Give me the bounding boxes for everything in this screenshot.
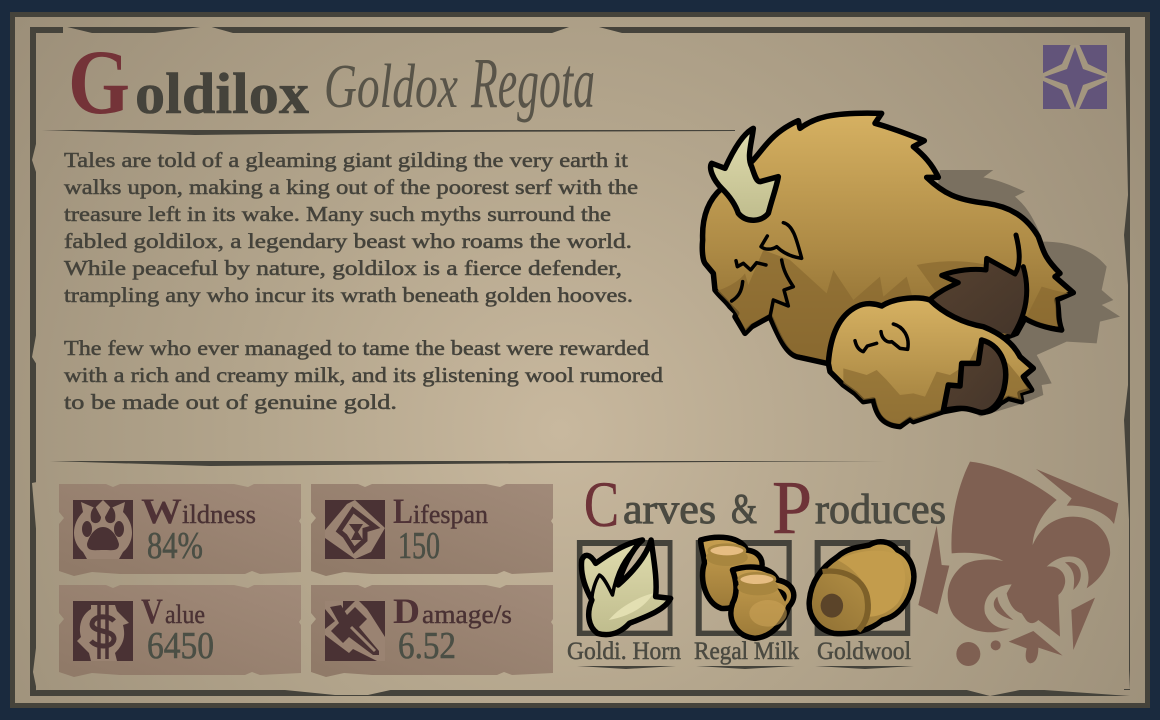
label: lifespan: L — [393, 491, 413, 531]
title: Goldilox: oldilox — [135, 61, 309, 126]
horn — [711, 128, 778, 220]
description text: walks upon, making a king out of the poorest serf with the — [64, 175, 638, 199]
stat panel: wildness: ildness — [182, 500, 256, 529]
description text: treasure left in its wake. Many such myths surround the — [64, 202, 611, 226]
description text: to be made out of genuine gold. — [64, 390, 397, 414]
stat panel: damage: amage/s — [422, 600, 512, 629]
scientific name: Goldox — [324, 53, 458, 121]
heading: Carves & Produces: P — [772, 466, 812, 550]
heading: Carves & Produces: & — [731, 487, 757, 533]
divider: title — [42, 130, 735, 135]
label: Goldi. Horn: Goldi. Horn — [567, 638, 681, 665]
item: goldwool — [809, 540, 914, 636]
value: 6450: 6450 — [147, 625, 214, 667]
underline — [577, 666, 676, 669]
label: value: V — [141, 591, 163, 631]
icon: coin — [73, 601, 133, 661]
title: Goldilox: G — [68, 31, 130, 133]
description text: trampling any who incur its wrath beneath golden hooves. — [64, 283, 633, 307]
description text — [64, 148, 664, 414]
description text: fabled goldilox, a legendary beast who roams the world. — [64, 229, 632, 253]
label: Regal Milk: Regal Milk — [694, 638, 799, 665]
calf ear fur lines — [855, 324, 908, 352]
divider: stats — [50, 461, 885, 466]
item: regal milk — [696, 537, 794, 638]
stat panel: wildness — [59, 484, 301, 576]
rarity icon: purple star — [1043, 45, 1107, 109]
beast shadow — [913, 170, 1120, 417]
scientific name: Regota — [470, 43, 595, 123]
underline — [815, 666, 914, 669]
value: 84%: 84% — [147, 525, 203, 567]
underline — [696, 666, 795, 669]
icon: hourglass — [325, 500, 385, 559]
item frame — [577, 540, 672, 636]
rear leg — [930, 259, 1026, 335]
label: wildness: W — [141, 491, 182, 531]
icon: paw — [73, 500, 133, 559]
description text: Tales are told of a gleaming giant gilding the very earth it — [64, 148, 628, 172]
label: damage per second: D — [393, 591, 420, 631]
heading: Carves & Produces — [584, 466, 946, 550]
item: goldi horn — [577, 540, 672, 636]
heading: Carves & Produces: arves — [623, 487, 716, 533]
heading: Carves & Produces: C — [584, 469, 619, 541]
calf body — [828, 298, 1033, 427]
description text: The few who ever managed to tame the beast were rewarded — [64, 336, 650, 360]
label: Goldwool: Goldwool — [817, 638, 911, 665]
back jug icon — [701, 537, 762, 609]
darker lower fur — [717, 250, 1068, 360]
title: Goldilox — [68, 31, 309, 133]
stat panel: value: alue — [165, 600, 205, 629]
icon: sword — [325, 601, 385, 661]
item frame — [696, 540, 792, 636]
stat panel: lifespan — [311, 484, 553, 576]
wool roll icon — [809, 542, 914, 634]
stat panel: lifespan: ifespan — [413, 500, 488, 529]
value: 150: 150 — [398, 525, 440, 567]
adult body — [702, 113, 1073, 363]
value: 6.52: 6.52 — [398, 625, 456, 667]
front jug icon — [731, 567, 794, 638]
beast illustration: goldilox — [702, 113, 1120, 427]
calf leg — [943, 340, 1006, 413]
ear and face fur lines — [732, 223, 802, 317]
horn shard icon — [581, 540, 671, 635]
stat panel: value — [59, 585, 301, 677]
description text: with a rich and creamy milk, and its glistening wool rumored — [64, 363, 664, 387]
scientific name — [324, 43, 595, 123]
description text: While peaceful by nature, goldilox is a fierce defender, — [64, 256, 622, 280]
heading: Carves & Produces: roduces — [815, 487, 946, 533]
stat panel: damage — [311, 585, 553, 677]
item frame — [815, 540, 910, 636]
calf lower fur — [843, 340, 1030, 424]
watermark: fleur-de-lis — [918, 462, 1118, 666]
